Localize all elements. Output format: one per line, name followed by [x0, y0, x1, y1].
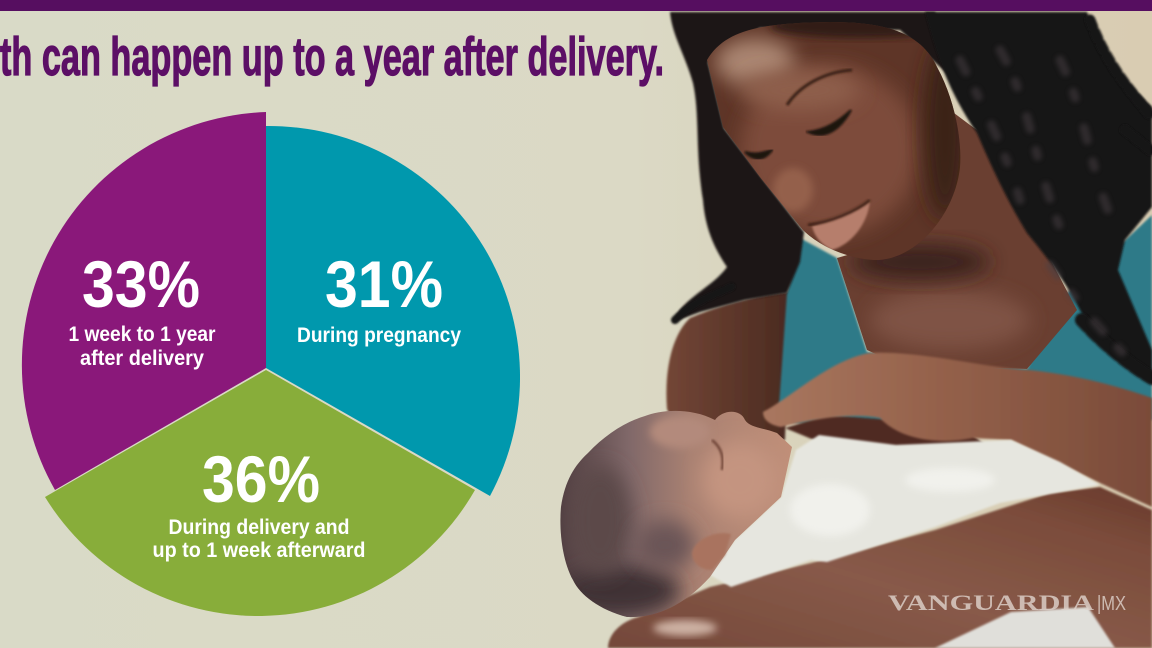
- label: 33%: 33%: [82, 247, 200, 321]
- label: 33%: after delivery: [80, 347, 204, 370]
- curly hair edges: [675, 20, 1152, 378]
- baby head: [560, 410, 792, 618]
- dark shadow under hand: [785, 415, 985, 447]
- top purple bar: [0, 0, 1152, 11]
- watermark: [888, 590, 1126, 615]
- mouth: [812, 200, 870, 250]
- baby closed eye: [712, 440, 723, 470]
- teal tank top: [778, 215, 1152, 440]
- lotion mark on arm: [653, 620, 717, 636]
- lower arm under baby: [608, 487, 1152, 648]
- slice: 33% purple: [22, 112, 266, 490]
- blanket folds: [790, 468, 995, 536]
- left shoulder and arm: [666, 292, 790, 440]
- label: 36%: [152, 442, 366, 562]
- pie chart: [22, 112, 520, 616]
- slice: 31% teal: [266, 126, 520, 496]
- watermark: VANGUARDIA: [888, 590, 1094, 615]
- eyes: [808, 110, 851, 135]
- label: 33%: [68, 247, 216, 370]
- baby ear: [692, 533, 731, 570]
- hair highlights: [960, 50, 1130, 360]
- slice: 36% green: [45, 370, 475, 616]
- heading: th can happen up to a year after delivery.: [0, 27, 664, 87]
- white blanket: [710, 435, 1100, 587]
- hair: left mass and top: [670, 12, 965, 322]
- label: 36%: 36%: [202, 442, 320, 516]
- neck and chest: [837, 114, 1077, 369]
- face: [707, 22, 960, 260]
- label: 36%: During delivery and: [168, 516, 350, 539]
- label: 31%: During pregnancy: [297, 324, 461, 347]
- lower blanket: [935, 607, 1115, 648]
- eyebrow: [787, 70, 852, 105]
- photo: mother and baby: [555, 12, 1152, 648]
- label: 31%: 31%: [325, 247, 443, 321]
- watermark: |MX: [1097, 593, 1126, 615]
- hair: right mass: [925, 12, 1152, 378]
- label: 33%: 1 week to 1 year: [68, 323, 216, 346]
- hand and forearm: [763, 353, 1152, 507]
- label: 31%: [297, 247, 461, 347]
- label: 36%: up to 1 week afterward: [152, 539, 366, 562]
